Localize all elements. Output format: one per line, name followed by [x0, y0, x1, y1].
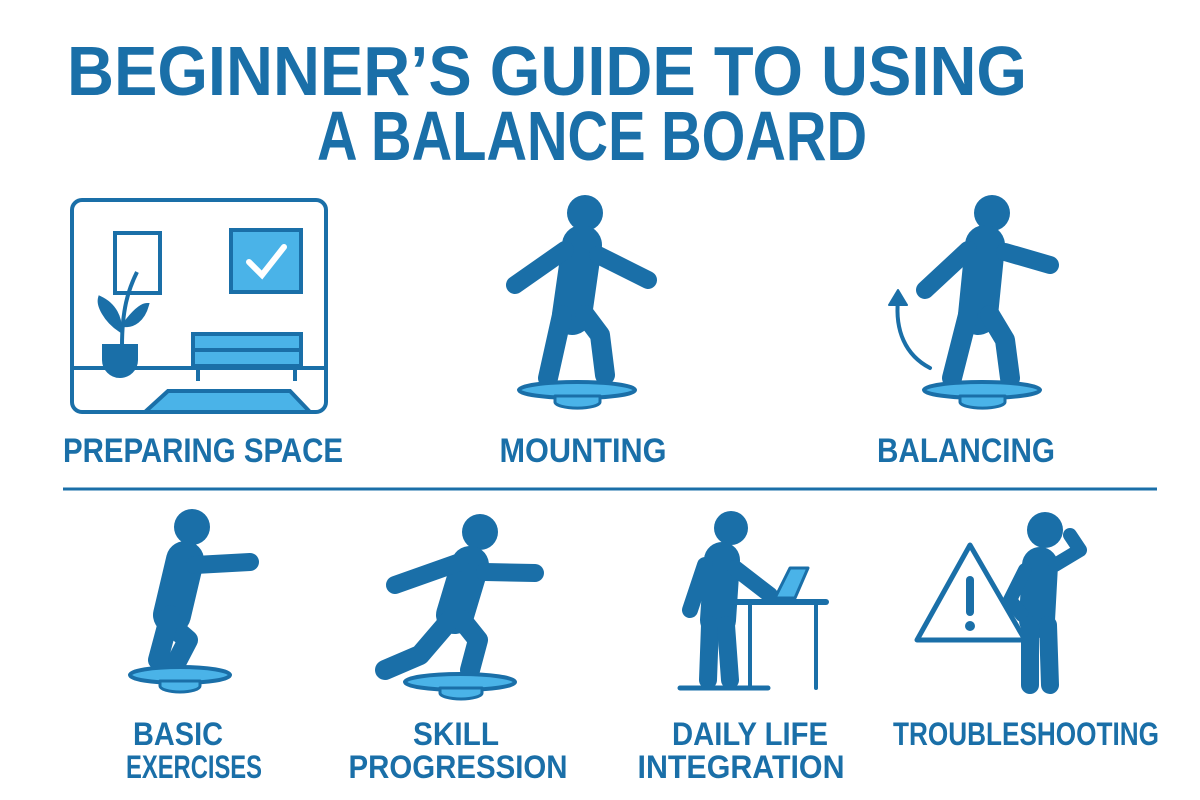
title [67, 32, 1027, 175]
label: balancing: BALANCING [877, 432, 1055, 470]
label: mounting: MOUNTING [500, 432, 666, 470]
icon: daily life desk [680, 511, 826, 688]
icon: preparing space room [72, 200, 326, 412]
label: basic exercises: BASIC [133, 716, 223, 752]
label: preparing space: PREPARING SPACE [63, 432, 343, 470]
label: skill progression: PROGRESSION [348, 749, 568, 785]
icon: skill progression [385, 514, 535, 699]
icon: troubleshooting warning and figure [917, 512, 1080, 685]
label: basic exercises: EXERCISES [126, 749, 262, 785]
label: skill progression [348, 716, 568, 785]
icon: balancing figure [889, 195, 1050, 408]
title: BEGINNER’S GUIDE TO USING [67, 32, 1027, 110]
label: basic exercises [126, 716, 262, 785]
label: daily life integration: INTEGRATION [638, 749, 844, 785]
icon: mounting figure [515, 195, 648, 408]
label: daily life integration: DAILY LIFE [672, 716, 828, 752]
icon: basic exercises squat [130, 509, 250, 692]
label: daily life integration [638, 716, 844, 785]
title: A BALANCE BOARD [317, 97, 867, 175]
label: skill progression: SKILL [413, 716, 499, 752]
